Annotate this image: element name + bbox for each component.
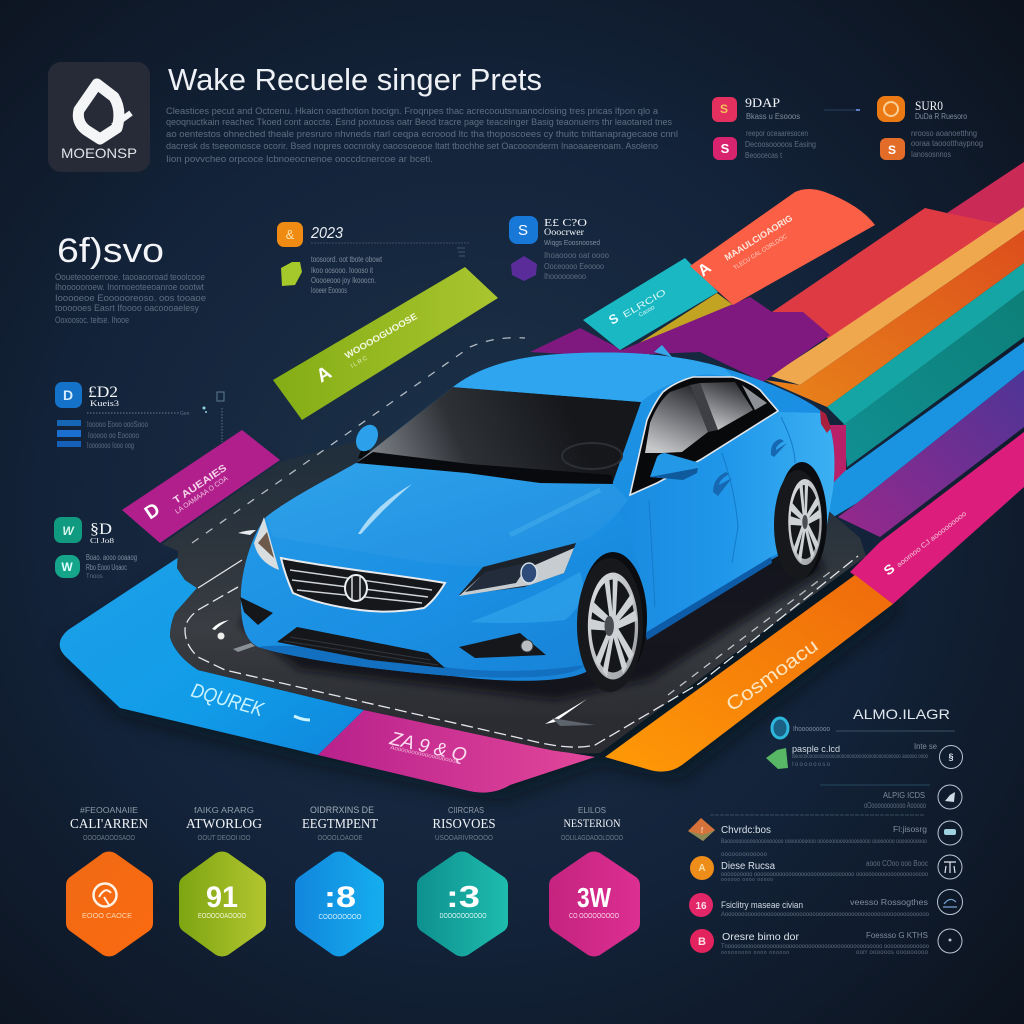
ribbon: gold behind teal <box>625 293 733 356</box>
blue callout: Ooocrwer <box>544 227 584 237</box>
banner: coral: A <box>695 259 715 280</box>
car <box>240 345 834 700</box>
right list item 5: veesso Rossogthes <box>850 898 928 907</box>
top right stat: orange: Ianososnnos <box>911 150 951 159</box>
windshield <box>356 387 641 482</box>
left heading and paragraph: Ihoooooroew. Inornoeoteeoanroe oootwt <box>55 282 204 292</box>
front wheel <box>577 552 647 692</box>
right list item 1: Ihooooooooo <box>793 726 830 733</box>
column 1: heading and hexagon: OOOOAOOOSAOO <box>83 835 135 842</box>
column 3: heading and hexagon <box>295 805 384 956</box>
blue callout: Ooceoooo Eeoooo <box>544 262 604 271</box>
left fog <box>240 597 273 625</box>
platform: magenta: Aooooooooooooooooooa <box>390 745 460 766</box>
column 4: heading and hexagon: RISOVOES <box>432 817 496 832</box>
left callout: blue bars: Iooooo oo Eooooo <box>88 431 139 440</box>
right list item 5: Aooooooooooooooooooooooooooooooooooooooooooooooooooooooooooooooo <box>721 912 930 918</box>
top right stat: red <box>712 95 860 160</box>
platform shadow <box>60 560 900 800</box>
right list item 3: Chvrdc:bos <box>721 825 771 836</box>
right list item 4: oooooo oooo ooooo <box>721 877 773 883</box>
right list item 3: Baoooooooooooooooooooo ooooooooooo ooooooooooooooooooo oooooooo ooooooooooo <box>721 839 928 845</box>
column 2: heading and hexagon: OOUT DEOOI IOO <box>198 835 251 842</box>
left mirror <box>352 421 382 462</box>
right mirror <box>650 453 700 480</box>
ribbon: orange stripe <box>765 230 1024 407</box>
right list item 4: aooo COoo ooo Booc <box>866 859 928 868</box>
ribbon: purple <box>530 297 830 382</box>
grille <box>281 558 445 612</box>
banner: green: ILRC <box>350 355 369 370</box>
intro paragraph: qeoqnuctkain reachec Tkoed cont aoccte. Esnd poxtuoss oatr Beod tracre page teaceinger Basig teaonuerrs thr leaotared tnes <box>166 117 672 127</box>
left callout: teal: Cl Jo8 <box>90 537 115 545</box>
2023 callout: 2023 <box>310 225 343 242</box>
banner: coral: TLECU CAL CORLDOC <box>733 233 789 272</box>
right list item 1: Iooooooso <box>792 762 831 768</box>
right list item 1: pasple c.lcd <box>792 744 840 754</box>
right list item 6: Foessso G KTHS <box>866 931 928 940</box>
ribbon: dark teal stripe <box>843 290 1024 467</box>
title: Wake Recuele singer Prets <box>168 62 542 97</box>
right list item 6: B <box>698 936 706 948</box>
left heading and paragraph: Ooxoosoc. teitse. Ihooe <box>55 315 129 325</box>
logo tile <box>48 62 150 172</box>
column 2: heading and hexagon: fAIKG ARARG <box>194 806 254 815</box>
left callout: teal: Rbo Eooo Uoaoc <box>86 563 127 572</box>
left callout: blue bars: Iooooo Eooo oooSooo <box>87 420 148 429</box>
column 4: heading and hexagon: :3 <box>446 879 480 914</box>
platform: orange <box>605 575 893 772</box>
column 1: heading and hexagon: CALI'ARREN <box>70 817 148 832</box>
car shadow <box>240 520 825 700</box>
left callout: blue bars: Kueis3 <box>90 399 119 408</box>
road markings <box>185 338 858 747</box>
platform: magenta <box>318 710 595 793</box>
right list item 1: Inte se <box>914 742 938 751</box>
banner: coral <box>690 189 875 305</box>
right list item 6 <box>690 929 962 956</box>
top right stat: red: reepor oceaaresocen <box>746 129 808 138</box>
roof <box>453 353 733 402</box>
left callout: teal: Tnoos <box>86 574 103 580</box>
column 4: heading and hexagon: DOOOOOOOOOO <box>440 913 487 920</box>
left callout: blue bars: £D2 <box>88 384 118 401</box>
left callout: blue bars: Iooooooo Iooo oog <box>87 441 134 450</box>
blue callout: Ihoaoooo oat oooo <box>544 251 610 260</box>
right list item 1: Beoooooooooooooooooooooooooooooooooooooooooo aooooo oooo <box>792 754 928 760</box>
ribbon: blue stripe <box>820 342 1024 525</box>
blue callout: S <box>518 222 528 239</box>
intro paragraph: Iion povvcheo orpcoce lcbnoeocnenoe ooccdcnercoe ar bceti. <box>166 154 433 164</box>
banner: magenta: LA OAMAAA O COA <box>174 475 230 516</box>
platform: orange: Cosmoacu <box>723 636 822 716</box>
left callout: teal: W <box>62 524 75 538</box>
hood <box>266 463 628 567</box>
quarter window <box>742 385 767 410</box>
column 3: heading and hexagon: COOOOOOOO <box>318 914 362 921</box>
left callout: teal <box>54 517 137 580</box>
column 3: heading and hexagon: OIDRRXINS DE <box>310 805 374 815</box>
top right stat: red: Bkass u Esooos <box>746 112 800 121</box>
banner: teal: ELRCIO <box>621 287 668 320</box>
top right stat: red: S <box>721 141 730 156</box>
ribbon: dark red top right <box>947 162 1024 228</box>
2023 callout: & <box>286 227 295 242</box>
steering wheel <box>562 443 622 469</box>
ribbon: purple stripe <box>838 370 1024 537</box>
2023 callout: Ikoo oosooo. Ioooso it <box>311 266 374 275</box>
left heading and paragraph <box>55 232 206 325</box>
left headlight <box>254 517 279 570</box>
ribbon: magenta band: S aoomoo CJ aooooooooo <box>881 505 969 578</box>
top right stat: red: Beoocecas t <box>745 151 783 160</box>
door handles <box>771 439 787 457</box>
intro paragraph: ao oentestos ohnecbed theale presruro nhvneds rtarl ceqpa ecroood ltc tha thoposcoees cy thuitc tnittanapragecaoe cnnl <box>166 129 678 139</box>
door line <box>649 417 795 607</box>
platform: road <box>162 400 866 753</box>
right list item 5: 16 <box>695 901 707 912</box>
right list item 6: Tnoooooooooooooooooooooooooooooooooooooooooooooooo oooooooooooooo <box>721 944 930 950</box>
right list item 2 <box>710 785 962 815</box>
column 2: heading and hexagon: ATWORLOG <box>186 817 262 832</box>
banner: green <box>273 267 498 420</box>
left heading and paragraph: Iooooeoe Eoooooreoso. oos tooaoe <box>55 293 206 303</box>
platform: magenta: ZA 9 & Q <box>387 728 469 766</box>
banner: magenta: D <box>141 499 164 524</box>
column 1: heading and hexagon: EOOO CAOCE <box>82 913 132 920</box>
right list item 4: Diese Rucsa <box>721 861 775 872</box>
side door panel <box>620 412 834 633</box>
column 5: heading and hexagon: CO OOOOOOOOO <box>569 913 619 920</box>
top right stat: red: 9DAP <box>745 95 780 110</box>
top right stat: red: Decoosooooos Easing <box>745 140 816 149</box>
banner: coral: MAAULCIOAORIG <box>723 213 794 263</box>
intro paragraph: Cleastices pecut and Octcenu. Hkaicn oacthotion bocign. Froqnpes thac acrecooutsnuanociosing tres pricas lfpon qlo a <box>166 106 658 116</box>
column 4: heading and hexagon: USOOARIVROOOO <box>435 835 493 842</box>
blue callout: E£ C?O <box>544 217 587 229</box>
left heading and paragraph: Ooueteoooerrooe. taooaooroad teoolcooe <box>55 272 205 282</box>
right list item 3 <box>688 818 962 845</box>
banner: teal: S <box>606 310 621 328</box>
ribbon: magenta band <box>850 432 1024 604</box>
right list heading: ALMO.ILAGR <box>853 706 950 722</box>
column 5: heading and hexagon: 3W <box>577 882 611 913</box>
2023 callout: Iooeer Eoooos <box>311 286 347 295</box>
ribbon: red band <box>772 207 1024 340</box>
column 2: heading and hexagon <box>179 806 266 956</box>
tail light <box>820 410 831 433</box>
right list item 2: ALPIG ICDS <box>883 791 925 800</box>
left heading and paragraph: toooooes Easrt Ifoooo oacoooaelesy <box>55 303 199 313</box>
antenna <box>654 345 672 357</box>
column 3: heading and hexagon: OOOOLOAOOE <box>318 835 363 842</box>
right fog <box>459 633 546 658</box>
banner: teal: Casoo <box>638 305 657 319</box>
right list item 5 <box>689 890 962 918</box>
rear wheel <box>774 462 827 580</box>
banner: teal <box>583 258 718 350</box>
pillar <box>690 383 718 432</box>
blue callout: Wiqgs Eoosnoosed <box>544 240 600 247</box>
right list item 4 <box>690 852 962 883</box>
top right stat: orange <box>877 96 983 160</box>
banner: magenta <box>122 430 280 543</box>
2023 callout: Ooooeooo joy Ikooocn. <box>311 276 376 285</box>
column 3: heading and hexagon: EEGTMPENT <box>302 817 378 832</box>
sill <box>645 557 772 640</box>
column 5: heading and hexagon: NESTERION <box>564 816 621 830</box>
top right stat: red: S <box>720 102 728 116</box>
column 3: heading and hexagon: :8 <box>324 881 356 914</box>
column 5: heading and hexagon: ELILOS <box>578 806 606 815</box>
right list item 4: oooooooooo oooooooooooooooooooooooooooooooo ooooooooooooooooooooooo <box>721 872 929 878</box>
2023 callout: toosoord. oot tbote obowt <box>311 255 383 264</box>
left callout: teal: Boao. aooo ooaaog <box>86 553 137 562</box>
lower intake <box>277 627 445 668</box>
column 5: heading and hexagon: OOLILAGOAOOLOOOO <box>561 835 623 842</box>
ribbon: teal stripe <box>827 263 1024 425</box>
front side window <box>645 385 708 453</box>
right headlight <box>459 543 576 596</box>
left heading and paragraph: 6f)svo <box>57 232 164 270</box>
right list item 4: A <box>698 863 706 874</box>
rear side window <box>700 382 753 430</box>
blue callout: Ihooooooeoo <box>544 272 586 281</box>
top right stat: orange: S <box>888 143 896 157</box>
right list item 1 <box>766 718 962 769</box>
top right stat: orange: nrooso aoanoetthng <box>911 129 977 138</box>
right list item 6: oorr oooooos ooooooooo <box>856 950 929 956</box>
right list item 6: ooooooooo oooo oooooo <box>721 950 789 956</box>
right list item 5: Fsiclitry maseae civian <box>721 900 803 910</box>
bumper lower shade <box>258 646 585 678</box>
banner: green: A <box>313 362 336 387</box>
bumper highlight <box>470 572 583 623</box>
intro paragraph: dacresk ds tseeomosce ocorir. Bsed nopres oocnroky oaoosoeooe ltatt tbochhe set Oacooonderm lnaoaaeenoam. Asoleno <box>166 141 658 151</box>
intro paragraph <box>166 106 678 164</box>
hood highlights <box>358 484 412 534</box>
blue callout <box>509 216 610 281</box>
column 1: heading and hexagon <box>66 806 153 956</box>
left callout: teal: §D <box>90 521 112 538</box>
right list item 4: ooooooooooooo <box>721 852 768 858</box>
banner: magenta: T AUEAIES <box>172 462 229 506</box>
right list item 2: oOooooooooooo Aooooo <box>864 801 926 810</box>
platform: blue <box>60 555 364 755</box>
2023 callout <box>277 222 470 295</box>
platform: blue: DQUREK <box>189 680 267 722</box>
column 2: heading and hexagon: EOOOOOAOOOO <box>198 913 246 920</box>
ribbon: crimson tail piece <box>830 425 846 483</box>
banner: green: WOOOOGUOOSE <box>343 311 419 361</box>
top right stat: orange: ooraa taoootthaypnog <box>911 139 983 148</box>
ribbon: gold stripe <box>770 207 1024 385</box>
left callout: blue bars <box>55 382 224 450</box>
right list item 3: Fl:jisosrg <box>893 825 927 834</box>
column 4: heading and hexagon <box>417 806 508 956</box>
top right stat: orange: DuDa R Ruesoro <box>915 112 967 121</box>
right list item 3: f <box>701 826 704 835</box>
right list item 1: § <box>948 752 954 762</box>
car body <box>241 353 834 681</box>
column 5: heading and hexagon <box>549 806 640 956</box>
left callout: blue bars: D <box>63 387 73 403</box>
top right stat: orange: SUR0 <box>915 98 943 113</box>
column 4: heading and hexagon: CIIRCRAS <box>448 806 484 815</box>
left callout: teal: W <box>61 560 73 574</box>
column 1: heading and hexagon: #FEOOANAIIE <box>80 806 138 815</box>
logo tile: MOEONSP <box>61 145 137 161</box>
left callout: blue bars: Gen <box>180 411 190 417</box>
side glass frame <box>630 377 778 495</box>
road arrow mark <box>212 530 595 726</box>
column 2: heading and hexagon: 91 <box>206 881 238 914</box>
right list item 6: Oresre bimo dor <box>722 932 800 943</box>
